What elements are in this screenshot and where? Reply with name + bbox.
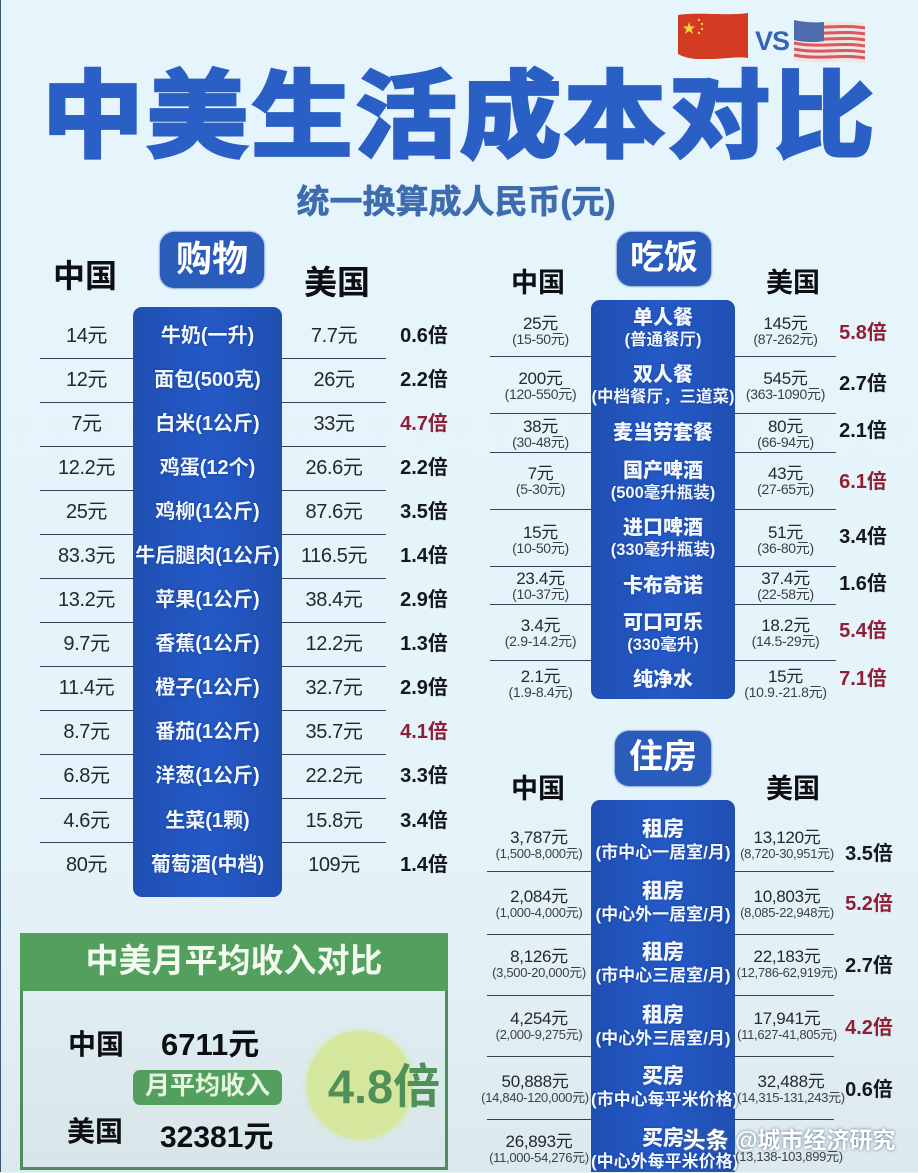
row: cappuccino bbox=[490, 569, 887, 605]
row: cola: (2.9-14.2元) bbox=[505, 633, 576, 649]
row: rent city 3br: (12,786-62,919元) bbox=[737, 965, 837, 980]
heading: dining bbox=[617, 232, 711, 286]
row: buy city: 50,888元 bbox=[502, 1072, 568, 1091]
row: cola: (330毫升) bbox=[627, 636, 699, 654]
row: rent suburb 1br: (1,000-4,000元) bbox=[496, 905, 582, 920]
row: rent suburb 1br: 租房 bbox=[642, 880, 684, 903]
row: rent city 1br: 13,120元 bbox=[754, 828, 820, 847]
row: domestic beer: 6.1倍 bbox=[839, 471, 887, 493]
row: cola: 3.4元 bbox=[521, 616, 560, 635]
row: tomatoes bbox=[40, 720, 448, 755]
row: wine: 1.4倍 bbox=[400, 854, 448, 876]
row: onions bbox=[40, 764, 448, 799]
row: imported beer: 15元 bbox=[523, 523, 558, 542]
row: bananas: 香蕉(1公斤) bbox=[155, 633, 260, 655]
row: rent suburb 3br: (2,000-9,275元) bbox=[496, 1027, 582, 1042]
row: water: (1.9-8.4元) bbox=[509, 684, 572, 700]
row: imported beer: 51元 bbox=[768, 523, 803, 542]
row: onions: 22.2元 bbox=[306, 765, 362, 787]
row: cappuccino: 37.4元 bbox=[761, 569, 810, 588]
column heading: USA: 美国 bbox=[766, 774, 820, 804]
row: imported beer: (36-80元) bbox=[757, 540, 814, 556]
row: bread: 26元 bbox=[313, 369, 355, 391]
row: rent city 1br: 3.5倍 bbox=[845, 843, 893, 865]
vs label: VS bbox=[755, 26, 789, 56]
row: rice: 白米(1公斤) bbox=[155, 413, 260, 435]
row: beef: 83.3元 bbox=[58, 545, 115, 567]
row: eggs: 26.6元 bbox=[306, 457, 362, 479]
row: meal for two: (363-1090元) bbox=[746, 386, 825, 402]
row: rent city 1br: (1,500-8,000元) bbox=[496, 846, 582, 861]
USA label: 美国 bbox=[67, 1116, 123, 1147]
China label: 中国 bbox=[68, 1029, 124, 1060]
row: chicken bbox=[40, 500, 448, 535]
icon: USA flag bbox=[794, 20, 866, 63]
row: beef: 1.4倍 bbox=[400, 545, 448, 567]
row: onions: 6.8元 bbox=[63, 765, 110, 787]
row: rent suburb 3br: (中心外三居室/月) bbox=[595, 1029, 731, 1048]
row: rent suburb 1br: (8,085-22,948元) bbox=[740, 905, 834, 920]
row: buy suburb: 买房 bbox=[642, 1127, 684, 1150]
row: eggs: 2.2倍 bbox=[400, 457, 448, 479]
row: rent suburb 3br: (11,627-41,805元) bbox=[737, 1027, 837, 1042]
row: rent suburb 1br: 10,803元 bbox=[754, 887, 820, 906]
row: cola: 5.4倍 bbox=[839, 620, 887, 642]
monthly income pill: 月平均收入 bbox=[145, 1072, 270, 1100]
row: rent city 1br: (8,720-30,951元) bbox=[740, 846, 834, 861]
row: McDonald's meal: 80元 bbox=[768, 417, 803, 436]
row: apples: 13.2元 bbox=[58, 589, 115, 611]
row: domestic beer: 43元 bbox=[768, 464, 803, 483]
row: buy suburb: (中心外每平米价格) bbox=[591, 1152, 738, 1171]
row: meal for two: (120-550元) bbox=[505, 386, 576, 402]
row: beef: 牛后腿肉(1公斤) bbox=[135, 545, 280, 567]
row: oranges: 橙子(1公斤) bbox=[155, 677, 260, 699]
row: buy city: (14,315-131,243元) bbox=[737, 1090, 845, 1105]
row: lettuce bbox=[40, 809, 448, 843]
row: buy city: 32,488元 bbox=[758, 1072, 824, 1091]
row: domestic beer: (5-30元) bbox=[516, 481, 565, 497]
icon: China flag bbox=[678, 13, 748, 59]
column heading: USA: 美国 bbox=[766, 268, 820, 298]
row: apples bbox=[40, 588, 448, 623]
row: tomatoes: 番茄(1公斤) bbox=[155, 721, 260, 743]
row: buy suburb bbox=[489, 1126, 843, 1172]
row: rent suburb 3br: 4.2倍 bbox=[845, 1017, 893, 1039]
row: rent city 1br bbox=[487, 817, 893, 872]
row: imported beer: 3.4倍 bbox=[839, 526, 887, 548]
row: lettuce: 3.4倍 bbox=[400, 810, 448, 832]
row: apples: 38.4元 bbox=[306, 589, 362, 611]
row: meal for two: 545元 bbox=[763, 369, 808, 388]
column heading: China: 中国 bbox=[511, 268, 565, 298]
row: milk: 0.6倍 bbox=[400, 325, 448, 347]
row: rice bbox=[40, 412, 448, 447]
row: McDonald's meal: (30-48元) bbox=[512, 434, 569, 450]
row: cappuccino: (22-58元) bbox=[757, 586, 814, 602]
row: meal for two: 2.7倍 bbox=[839, 373, 887, 395]
row: milk bbox=[40, 324, 448, 359]
blue item column bbox=[591, 300, 735, 699]
row: buy suburb: (11,000-54,276元) bbox=[489, 1150, 589, 1165]
row: meal for two: 双人餐 bbox=[633, 364, 693, 386]
row: McDonald's meal: 麦当劳套餐 bbox=[613, 422, 713, 444]
row: rent city 3br: 2.7倍 bbox=[845, 955, 893, 977]
row: chicken: 3.5倍 bbox=[400, 501, 448, 523]
row: rice: 4.7倍 bbox=[400, 413, 448, 435]
row: wine: 葡萄酒(中档) bbox=[151, 854, 264, 876]
row: water: (10.9.-21.8元) bbox=[744, 684, 827, 700]
row: single meal: 5.8倍 bbox=[839, 322, 887, 344]
row: eggs bbox=[40, 456, 448, 491]
row: domestic beer: (500毫升瓶装) bbox=[611, 484, 715, 502]
row: buy city: 买房 bbox=[642, 1065, 684, 1088]
row: rent suburb 3br bbox=[487, 1003, 893, 1057]
row: McDonald's meal: 2.1倍 bbox=[839, 420, 887, 442]
row: rent city 3br: 8,126元 bbox=[510, 947, 568, 966]
row: rent city 1br: (市中心一居室/月) bbox=[595, 843, 731, 862]
row: bread: 面包(500克) bbox=[154, 369, 261, 391]
row: bread bbox=[40, 368, 448, 403]
row: tomatoes: 4.1倍 bbox=[400, 721, 448, 743]
row: meal for two: (中档餐厅，三道菜) bbox=[592, 388, 734, 406]
title: 中美生活成本对比 bbox=[42, 65, 878, 169]
row: lettuce: 15.8元 bbox=[306, 810, 362, 832]
row: oranges bbox=[40, 676, 448, 711]
row: cola: 可口可乐 bbox=[623, 612, 703, 634]
row: bread: 2.2倍 bbox=[400, 369, 448, 391]
row: chicken: 25元 bbox=[66, 501, 107, 523]
row: water: 7.1倍 bbox=[839, 668, 887, 690]
row: buy suburb: (13,138-103,899元) bbox=[735, 1149, 843, 1164]
row: chicken: 87.6元 bbox=[306, 501, 362, 523]
row: cola: 18.2元 bbox=[761, 616, 810, 635]
panel: shopping bbox=[40, 230, 448, 897]
row: rent suburb 1br bbox=[487, 879, 893, 935]
row: oranges: 11.4元 bbox=[59, 677, 114, 699]
row: beef bbox=[40, 544, 448, 579]
row: rice: 33元 bbox=[313, 413, 355, 435]
row: meal for two: 200元 bbox=[518, 369, 563, 388]
column heading: China: 中国 bbox=[511, 774, 565, 804]
row: apples: 苹果(1公斤) bbox=[155, 589, 260, 611]
row: rent suburb 1br: 2,084元 bbox=[510, 887, 568, 906]
row: rent suburb 1br: 5.2倍 bbox=[845, 893, 893, 915]
row: bananas: 12.2元 bbox=[306, 633, 362, 655]
row: imported beer bbox=[490, 516, 887, 567]
row: bananas: 9.7元 bbox=[63, 633, 110, 655]
row: single meal: 25元 bbox=[523, 314, 558, 333]
row: rent suburb 1br: (中心外一居室/月) bbox=[595, 905, 731, 924]
row: onions: 洋葱(1公斤) bbox=[155, 765, 260, 787]
row: imported beer: (10-50元) bbox=[512, 540, 569, 556]
column heading: China: 中国 bbox=[53, 258, 117, 294]
row: imported beer: (330毫升瓶装) bbox=[611, 541, 715, 559]
row: lettuce: 4.6元 bbox=[63, 810, 110, 832]
row: lettuce: 生菜(1颗) bbox=[165, 810, 250, 832]
column heading: USA: 美国 bbox=[304, 264, 370, 301]
row: water: 15元 bbox=[768, 667, 803, 686]
row: rent city 1br: 3,787元 bbox=[510, 828, 568, 847]
row: single meal: (普通餐厅) bbox=[624, 331, 702, 349]
heading: housing: 住房 bbox=[629, 738, 697, 776]
row: milk: 7.7元 bbox=[311, 325, 357, 347]
row: domestic beer: 国产啤酒 bbox=[623, 460, 703, 482]
row: domestic beer: 7元 bbox=[528, 464, 553, 483]
row: rent city 3br: (市中心三居室/月) bbox=[595, 966, 731, 985]
heading: dining: 吃饭 bbox=[630, 239, 698, 277]
row: oranges: 2.9倍 bbox=[400, 677, 448, 699]
row: rent suburb 3br: 4,254元 bbox=[510, 1009, 568, 1028]
row: single meal: (15-50元) bbox=[512, 331, 569, 347]
row: cola: (14.5-29元) bbox=[752, 633, 819, 649]
row: rent city 3br bbox=[487, 940, 893, 996]
row: buy city bbox=[481, 1064, 893, 1120]
heading: shopping bbox=[160, 232, 264, 288]
heading: shopping: 购物 bbox=[176, 238, 248, 279]
panel: dining bbox=[490, 230, 887, 700]
row: cappuccino: 23.4元 bbox=[516, 569, 565, 588]
highlight circle bbox=[307, 1031, 413, 1139]
row: cappuccino: 1.6倍 bbox=[839, 573, 887, 595]
panel: monthly income bbox=[20, 933, 448, 1170]
row: buy city: 0.6倍 bbox=[845, 1079, 893, 1101]
row: oranges: 32.7元 bbox=[306, 677, 362, 699]
row: cappuccino: 卡布奇诺 bbox=[623, 575, 703, 597]
row: water: 2.1元 bbox=[521, 667, 560, 686]
row: tomatoes: 35.7元 bbox=[306, 721, 362, 743]
blue item column bbox=[591, 800, 735, 1172]
row: rent suburb 3br: 17,941元 bbox=[754, 1009, 820, 1028]
row: single meal: 单人餐 bbox=[633, 307, 693, 329]
row: cola bbox=[490, 611, 887, 661]
row: beef: 116.5元 bbox=[301, 545, 367, 567]
row: milk: 14元 bbox=[66, 325, 107, 347]
row: water bbox=[509, 667, 887, 700]
row: single meal: 145元 bbox=[763, 314, 808, 333]
watermark: 头条 @城市经济研究 bbox=[683, 1127, 895, 1153]
row: onions: 3.3倍 bbox=[400, 765, 448, 787]
row: eggs: 鸡蛋(12个) bbox=[160, 457, 255, 479]
row: imported beer: 进口啤酒 bbox=[623, 517, 703, 539]
row: rice: 7元 bbox=[71, 413, 102, 435]
row: single meal: (87-262元) bbox=[753, 331, 818, 347]
row: rent city 3br: 22,183元 bbox=[754, 947, 820, 966]
row: McDonald's meal bbox=[490, 417, 887, 453]
row: apples: 2.9倍 bbox=[400, 589, 448, 611]
row: water: 纯净水 bbox=[633, 669, 693, 691]
income header bbox=[20, 933, 448, 991]
row: single meal bbox=[490, 306, 887, 357]
row: tomatoes: 8.7元 bbox=[63, 721, 110, 743]
heading: housing bbox=[615, 731, 711, 786]
row: buy city: (14,840-120,000元) bbox=[481, 1090, 589, 1105]
subtitle: 统一换算成人民币(元) bbox=[296, 183, 615, 220]
row: bread: 12元 bbox=[66, 369, 107, 391]
row: buy city: (市中心每平米价格) bbox=[591, 1090, 738, 1109]
row: chicken: 鸡柳(1公斤) bbox=[155, 501, 260, 523]
row: domestic beer: (27-65元) bbox=[757, 481, 814, 497]
multiple: 4.8倍 bbox=[328, 1060, 440, 1113]
row: rent city 3br: 租房 bbox=[642, 941, 684, 964]
row: rent city 3br: (3,500-20,000元) bbox=[492, 965, 586, 980]
row: rent suburb 3br: 租房 bbox=[642, 1004, 684, 1027]
row: bananas: 1.3倍 bbox=[400, 633, 448, 655]
panel: housing bbox=[481, 729, 893, 1172]
row: buy suburb: 26,893元 bbox=[506, 1132, 572, 1151]
row: meal for two bbox=[490, 362, 887, 414]
row: eggs: 12.2元 bbox=[58, 457, 115, 479]
row: rent city 1br: 租房 bbox=[642, 818, 684, 841]
China income: 6711元 bbox=[161, 1027, 259, 1062]
USA income: 32381元 bbox=[160, 1121, 273, 1154]
monthly income pill bbox=[133, 1070, 282, 1105]
row: bananas bbox=[40, 632, 448, 667]
row: domestic beer bbox=[490, 459, 887, 510]
row: wine: 109元 bbox=[308, 854, 360, 876]
row: cappuccino: (10-37元) bbox=[512, 586, 569, 602]
row: McDonald's meal: 38元 bbox=[523, 417, 558, 436]
income header: 中美月平均收入对比 bbox=[86, 942, 382, 979]
row: milk: 牛奶(一升) bbox=[161, 325, 254, 347]
blue item column bbox=[133, 307, 282, 897]
row: wine bbox=[66, 853, 448, 876]
row: McDonald's meal: (66-94元) bbox=[757, 434, 814, 450]
row: wine: 80元 bbox=[66, 854, 107, 876]
